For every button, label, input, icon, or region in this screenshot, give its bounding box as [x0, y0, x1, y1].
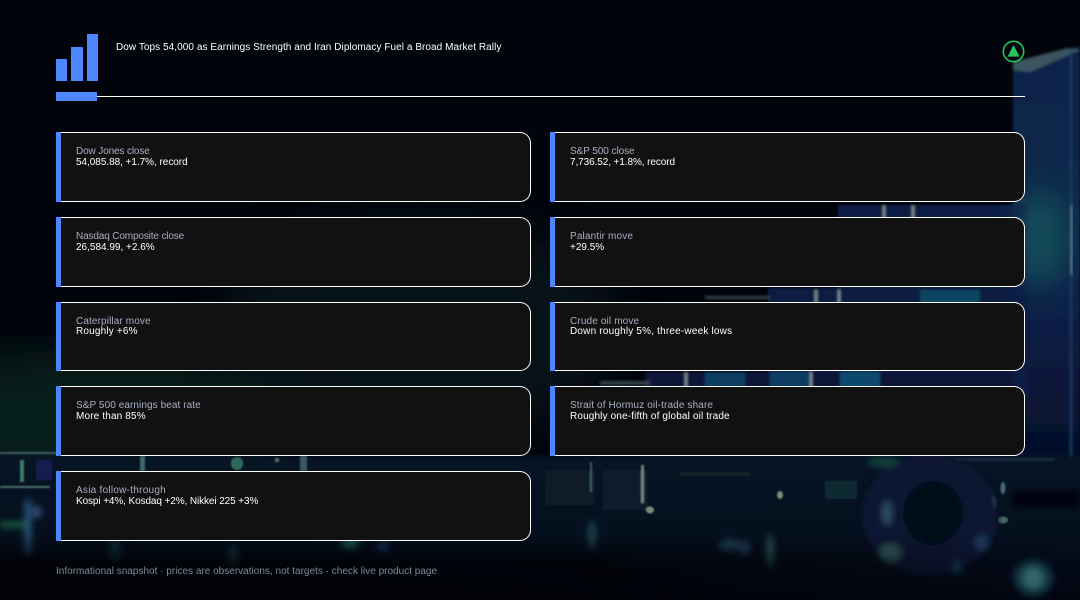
- card: Palantir move: Palantir move: [570, 231, 633, 242]
- card: S&P 500 earnings beat rate: S&P 500 earnings beat rate: [76, 400, 201, 411]
- card: Asia follow-through: [56, 471, 531, 541]
- card: Palantir move: +29.5%: [570, 242, 604, 253]
- header rule with accent block: [56, 92, 1025, 101]
- card: S&P 500 earnings beat rate: More than 85%: [76, 411, 146, 422]
- title: Dow Tops 54,000 as Earnings Strength and Iran Diplomacy Fuel a Broad Market Rally: [116, 42, 501, 53]
- card: Caterpillar move: Roughly +6%: [76, 326, 138, 337]
- card: Dow Jones close: Dow Jones close: [76, 146, 150, 157]
- card: Dow Jones close: [56, 132, 531, 202]
- card: Strait of Hormuz oil-trade share: Strait of Hormuz oil-trade share: [570, 400, 713, 411]
- card: Asia follow-through: Asia follow-through: [76, 485, 166, 496]
- header icon: bar chart: [56, 34, 98, 81]
- card: Caterpillar move: [56, 302, 531, 371]
- card: S&P 500 close: S&P 500 close: [570, 146, 635, 157]
- card: Nasdaq Composite close: [56, 217, 531, 287]
- card: Nasdaq Composite close: 26,584.99, +2.6%: [76, 242, 155, 253]
- card: Palantir move: [550, 217, 1025, 287]
- card: Caterpillar move: Caterpillar move: [76, 316, 151, 327]
- card: Crude oil move: [550, 302, 1025, 371]
- card: S&P 500 earnings beat rate: [56, 386, 531, 456]
- card: S&P 500 close: [550, 132, 1025, 202]
- footer note: Informational snapshot · prices are observations, not targets · check live product page: [56, 566, 437, 577]
- card: Strait of Hormuz oil-trade share: [550, 386, 1025, 456]
- card: Dow Jones close: 54,085.88, +1.7%, record: [76, 157, 188, 168]
- card: Strait of Hormuz oil-trade share: Roughly one-fifth of global oil trade: [570, 411, 730, 422]
- card: S&P 500 close: 7,736.52, +1.8%, record: [570, 157, 675, 168]
- card: Crude oil move: Crude oil move: [570, 316, 639, 327]
- icon: green up-triangle status badge: [1002, 40, 1024, 62]
- card: Asia follow-through: Kospi +4%, Kosdaq +2%, Nikkei 225 +3%: [76, 496, 258, 507]
- card: Crude oil move: Down roughly 5%, three-week lows: [570, 326, 732, 337]
- card: Nasdaq Composite close: Nasdaq Composite close: [76, 231, 184, 242]
